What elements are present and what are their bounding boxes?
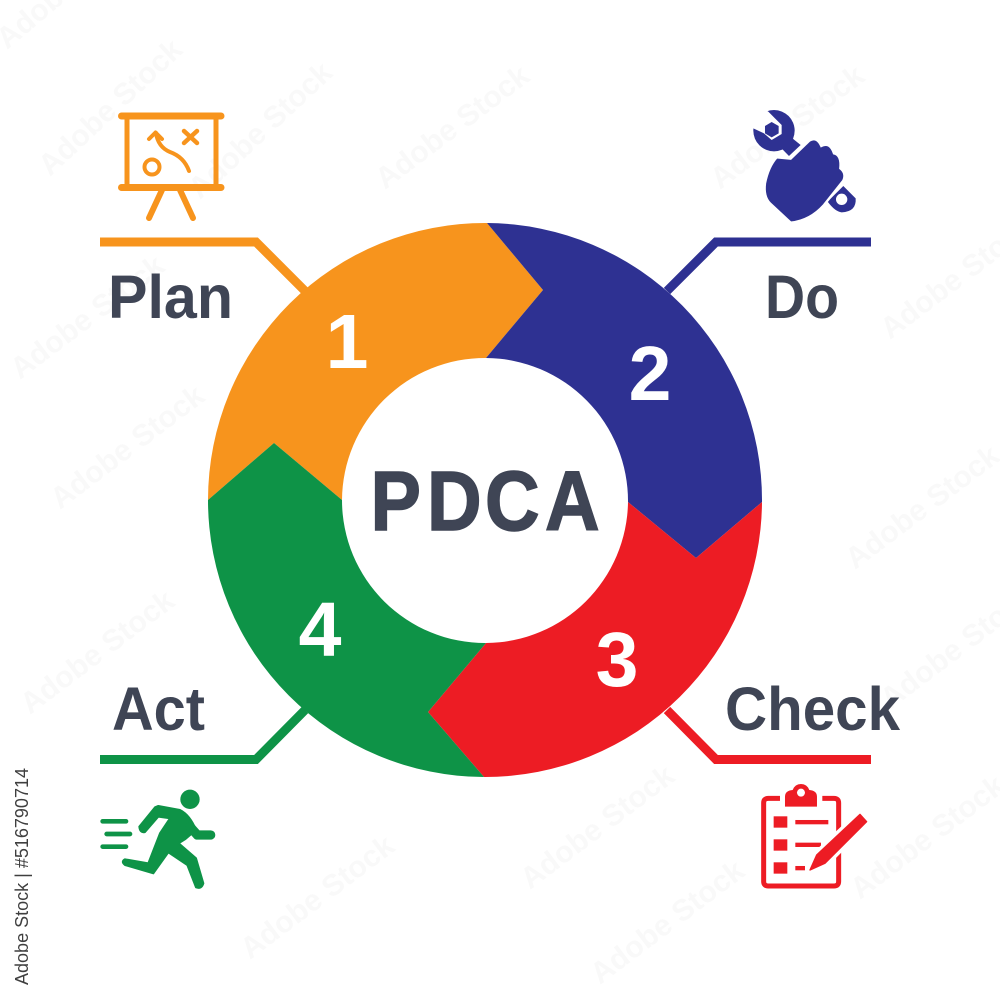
watermark pattern: Adobe Stock [514,759,681,896]
watermark pattern: Adobe Stock [704,59,871,196]
segment 4: Act [208,443,486,777]
icon: hand holding wrench [747,107,856,223]
watermark pattern: Adobe Stock [4,249,171,386]
center title PDCA: PDCA [371,454,600,548]
number 1: 1 [326,299,368,385]
connector: Act [100,710,305,760]
watermark pattern: Adobe Stock [234,829,401,966]
icon: running person [103,790,211,888]
label: Check: Check [725,675,900,743]
number 4: 4 [299,587,342,673]
watermark pattern: Adobe Stock [584,854,751,991]
watermark pattern: Adobe Stock [32,33,189,182]
PDCA cycle ring [208,223,762,777]
label: Act: Act [112,675,205,743]
watermark pattern: Adobe Stock [44,379,211,516]
watermark pattern: Adobe Stock [182,56,339,205]
number 2: 2 [629,331,671,417]
icon: clipboard checklist with pencil [764,784,867,886]
watermark pattern: Adobe Stock [14,584,181,721]
watermark pattern: Adobe Stock [369,59,536,196]
connector: Do [667,242,871,291]
connector: Plan [100,242,305,291]
segment 2: Do [486,223,762,558]
stock credit: Adobe Stock | #516790714 [12,768,32,985]
icon: strategy presentation board [122,116,221,218]
connector: Check [667,710,871,760]
label: Plan: Plan [108,263,233,331]
segment 3: Check [428,502,762,777]
number 3: 3 [596,617,638,703]
segment 1: Plan [208,223,543,500]
label: Do: Do [765,263,839,331]
